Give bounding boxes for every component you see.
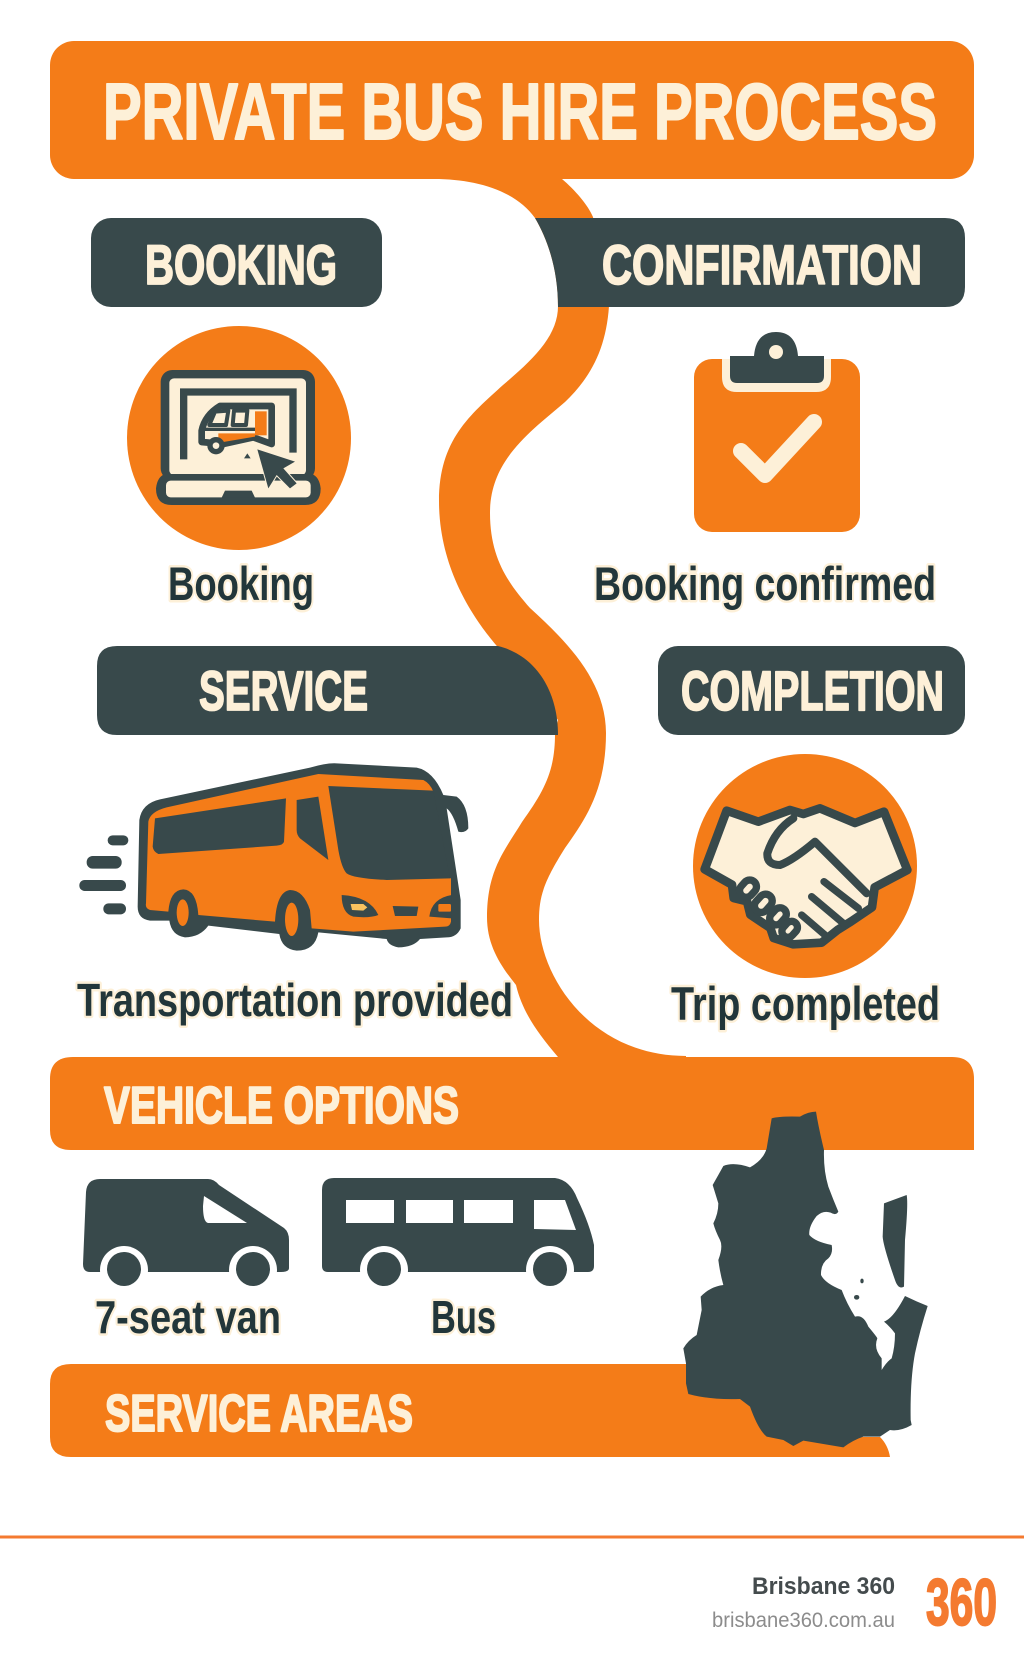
icon: van [83,1179,289,1294]
label: 7-seat van: 7-seat van [95,1291,281,1343]
vehicle: 7-seat van [83,1179,289,1343]
label: booking: Booking [168,557,314,610]
label: transportation provided: Transportation provided [77,974,513,1026]
icon: handshake [693,754,917,978]
footer: brand text: Brisbane 360 [752,1573,895,1600]
footer: brand text: brisbane360.com.au [712,1609,895,1632]
vehicle: bus [322,1178,594,1343]
icon: laptop with van and cursor [127,326,351,550]
panel: booking [91,218,382,610]
map: service region [683,1112,928,1447]
heading: completion [658,646,965,735]
footer: brand text [712,1573,895,1632]
icon: moving bus [79,763,468,951]
panel: confirmation [535,218,965,610]
label: bus: Bus [431,1291,496,1343]
heading: vehicle options: VEHICLE OPTIONS [104,1077,459,1135]
label: booking confirmed: Booking confirmed [594,557,936,610]
heading: booking [91,218,382,307]
heading: service areas [50,1364,890,1457]
title banner [50,41,974,179]
heading: confirmation [535,218,965,307]
icon: bus [322,1178,594,1294]
icon: clipboard with check [694,332,860,532]
label: trip completed: Trip completed [671,977,940,1030]
heading: vehicle options [50,1057,974,1150]
heading: service [97,646,558,735]
panel: service [77,646,558,1026]
heading: booking: BOOKING [145,233,337,296]
heading: service: SERVICE [199,659,368,722]
heading: confirmation: CONFIRMATION [602,233,922,296]
footer divider [0,1536,1024,1538]
heading: service areas: SERVICE AREAS [105,1385,413,1443]
winding road connector [434,170,686,1065]
panel: completion [658,646,965,1030]
